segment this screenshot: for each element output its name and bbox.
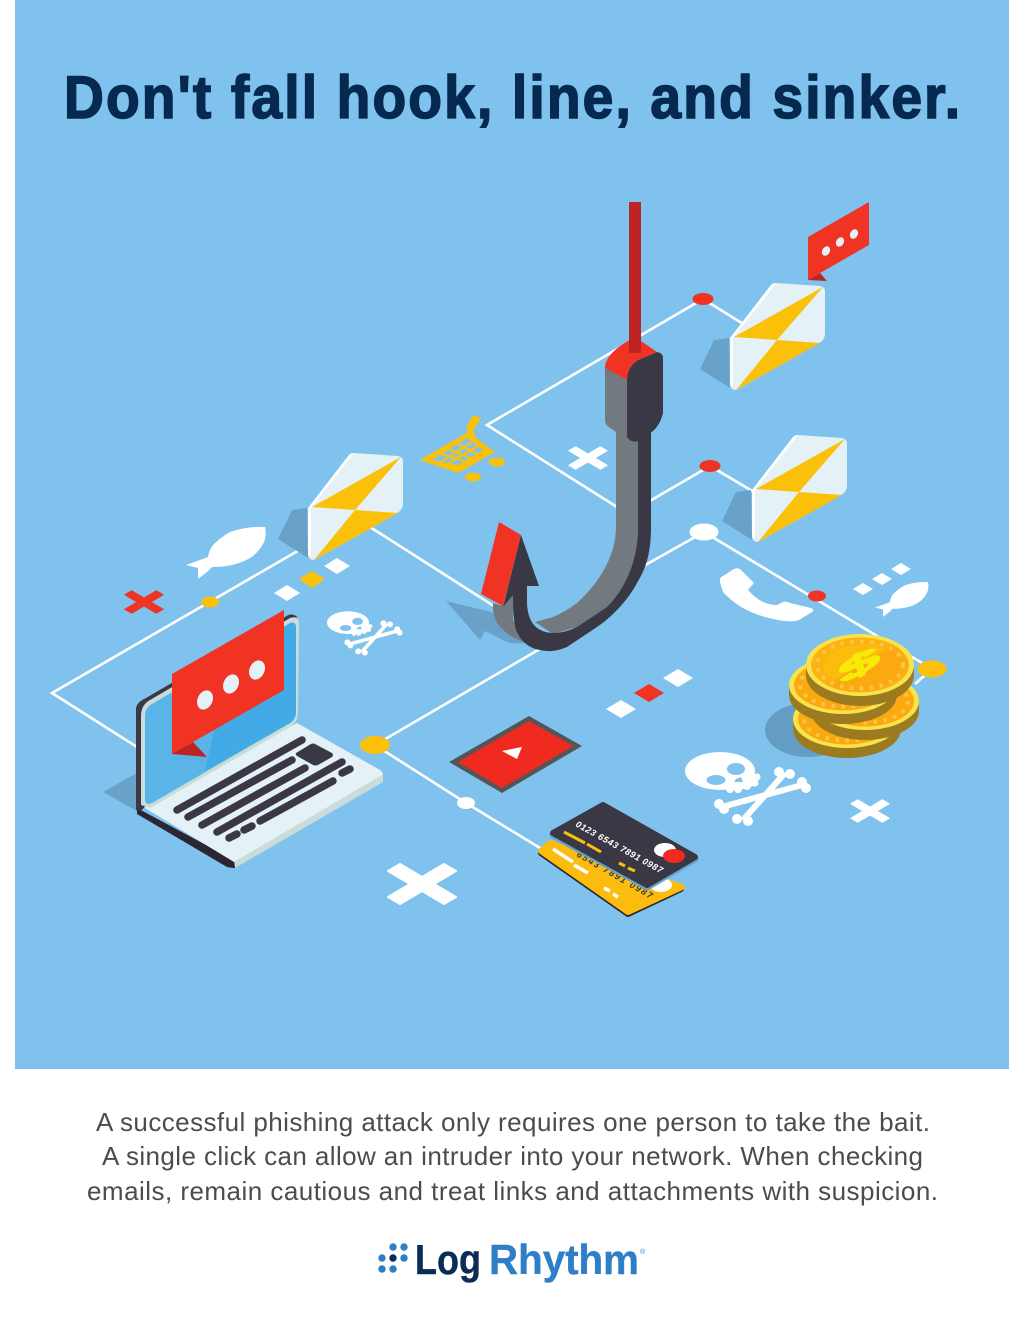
yellow card [541,843,682,914]
fishing line [629,202,641,353]
envelope: top right [700,283,825,390]
laptop screen [145,623,296,804]
icon: white x right [851,800,889,822]
laptop [103,610,383,868]
laptop shadow [103,773,137,811]
yellow card: 6543 7891 0987 [575,849,655,901]
speech bubble on laptop [172,610,284,757]
icon: video player [449,716,582,793]
hook barb red [481,522,521,606]
hook cap red [605,341,657,380]
coin right [811,672,919,740]
icon: red x left [125,591,163,613]
laptop keys [177,740,350,838]
hook shank grey face [535,430,638,634]
laptop lid back [136,614,297,810]
laptop base edge [234,773,383,868]
decorative diamonds right [853,563,911,595]
body text: emails, remain cautious and treat links and attachments with suspicion. [87,1176,938,1206]
envelope: middle right [722,435,847,542]
decorative diamonds bottom [606,669,693,718]
logo: LogRhythm: Rhythm [489,1236,639,1283]
panel: blue illustration background [15,0,1009,1069]
laptop trackpad key [296,744,333,766]
fishing hook [481,202,663,651]
hook tip grey face [493,593,530,643]
logo wordmark: Log [415,1236,481,1283]
coin middle [789,656,897,724]
logo dots [378,1243,408,1273]
coin top [806,634,914,706]
body text [87,1107,938,1206]
speech bubble: top right [808,202,869,281]
dollar sign: $ [835,639,883,691]
coin bottom [793,690,901,758]
icon: white x near cart [569,447,607,469]
icon: telephone [720,568,813,621]
laptop base [140,723,383,862]
hook shank dark edge [513,430,651,651]
laptop lid frame [141,617,299,808]
dark card: 0123 6543 7891 0987 [574,819,665,876]
icon: hook shadow [446,601,530,643]
icon: small skull and crossbones [327,611,403,656]
network lines [52,299,932,851]
icon: large skull and crossbones [685,752,811,826]
coin shadow [765,703,851,757]
icon: fish right [875,582,928,617]
body text: A successful phishing attack only requires one person to take the bait. [96,1107,930,1137]
icon: fish left [186,527,266,579]
icon: large white x [388,864,456,904]
network nodes [201,293,946,809]
envelope: left [278,453,403,560]
decorative diamonds left [274,558,350,601]
coin stack [765,634,919,758]
logo: LogRhythm [378,1236,646,1283]
logo: LogRhythm: ® [640,1248,646,1256]
title: Don't fall hook, line, and sinker. [64,65,960,132]
hook collar dark [627,352,663,442]
hook collar grey [605,368,627,436]
icon: shopping cart [420,415,505,482]
body text: A single click can allow an intruder into your network. When checking [102,1141,923,1171]
hook barb dark [503,535,539,607]
credit cards [541,805,695,914]
dark card [553,805,695,887]
